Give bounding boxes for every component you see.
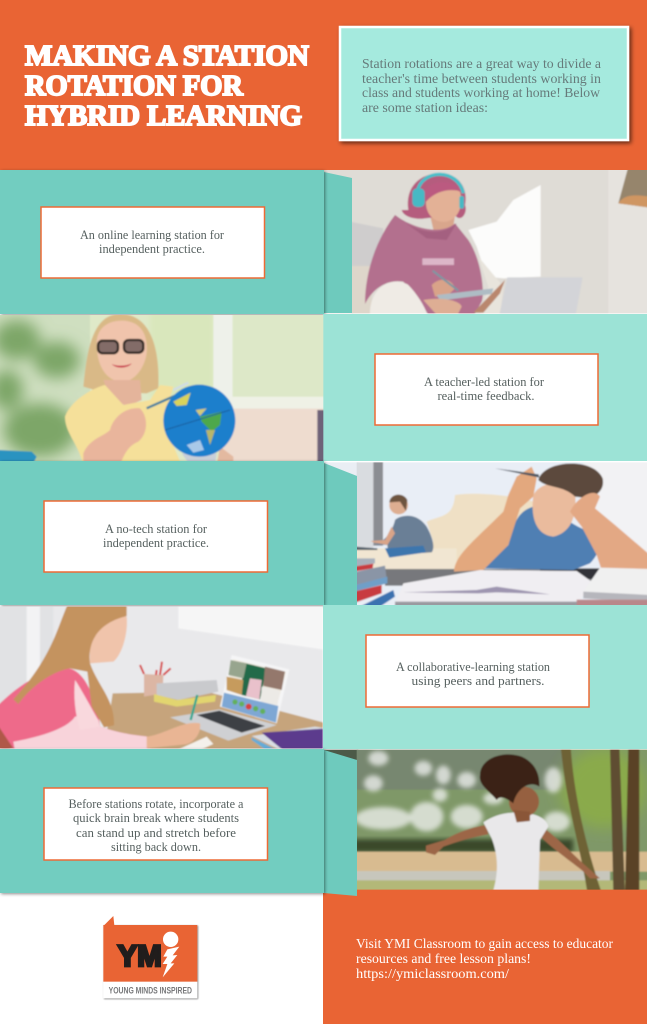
callout: collaborative-learning station: A collaborative-learning station [396,659,550,674]
callout: teacher-led station: real-time feedback. [438,388,534,403]
panel: intro text box [340,27,628,140]
text block: visit YMI Classroom: https://ymiclassroom.com/ [356,966,509,981]
panel: footer link background [323,889,647,1024]
callout: online learning station: independent practice. [99,241,205,256]
panel: station 5 teal band [0,749,357,896]
title: MAKING A STATION [25,41,309,72]
title [25,41,309,132]
callout: online learning station [41,207,264,278]
fold flap [324,172,352,313]
callout: brain break: sitting back down. [111,839,201,854]
icon: YMI logo: YM [118,940,162,973]
callout: no-tech station: A no-tech station for [105,521,208,536]
photo: student with headphones taking notes [323,167,647,317]
panel: intro text box: Station rotations are a great way to divide a [362,56,601,71]
photo: boys studying with books [323,459,647,609]
fold flap [324,750,357,896]
panel: station 4 light band [323,605,647,749]
callout: brain break: can stand up and stretch before [76,825,236,840]
panel: station 2 light band [323,314,647,461]
panel: station 3 teal band [0,461,357,605]
callout: no-tech station [44,501,268,572]
icon: YMI logo [103,916,197,998]
callout: teacher-led station: A teacher-led station for [424,374,545,389]
photo: girl at laptop in a video class [0,603,327,752]
callout: collaborative-learning station [366,635,589,707]
photo: girl running outdoors [323,746,647,893]
icon: YMI logo: YOUNG MINDS INSPIRED [109,986,192,996]
callout: no-tech station: independent practice. [103,535,209,550]
callout: brain break: quick brain break where students [73,810,239,825]
callout: brain break [44,788,268,860]
text block: visit YMI Classroom: Visit YMI Classroom to gain access to educator [356,936,613,951]
callout: teacher-led station [375,354,598,425]
text block: visit YMI Classroom [356,936,613,981]
panel: intro text box: teacher's time between students working in [362,71,601,86]
panel: header background [0,0,647,170]
text block: visit YMI Classroom: resources and free lesson plans! [356,951,531,966]
title: HYBRID LEARNING [25,101,302,132]
panel: intro text box: are some station ideas: [362,100,488,115]
panel: station 1 teal band [0,170,352,314]
callout: online learning station: An online learning station for [80,227,225,242]
title: ROTATION FOR [25,71,243,102]
fold flap [324,463,357,605]
callout: collaborative-learning station: using peers and partners. [412,673,544,688]
photo: teacher pointing at a globe [0,312,327,465]
panel: intro text box: class and students working at home! Below [362,85,600,100]
callout: brain break: Before stations rotate, incorporate a [68,796,244,811]
